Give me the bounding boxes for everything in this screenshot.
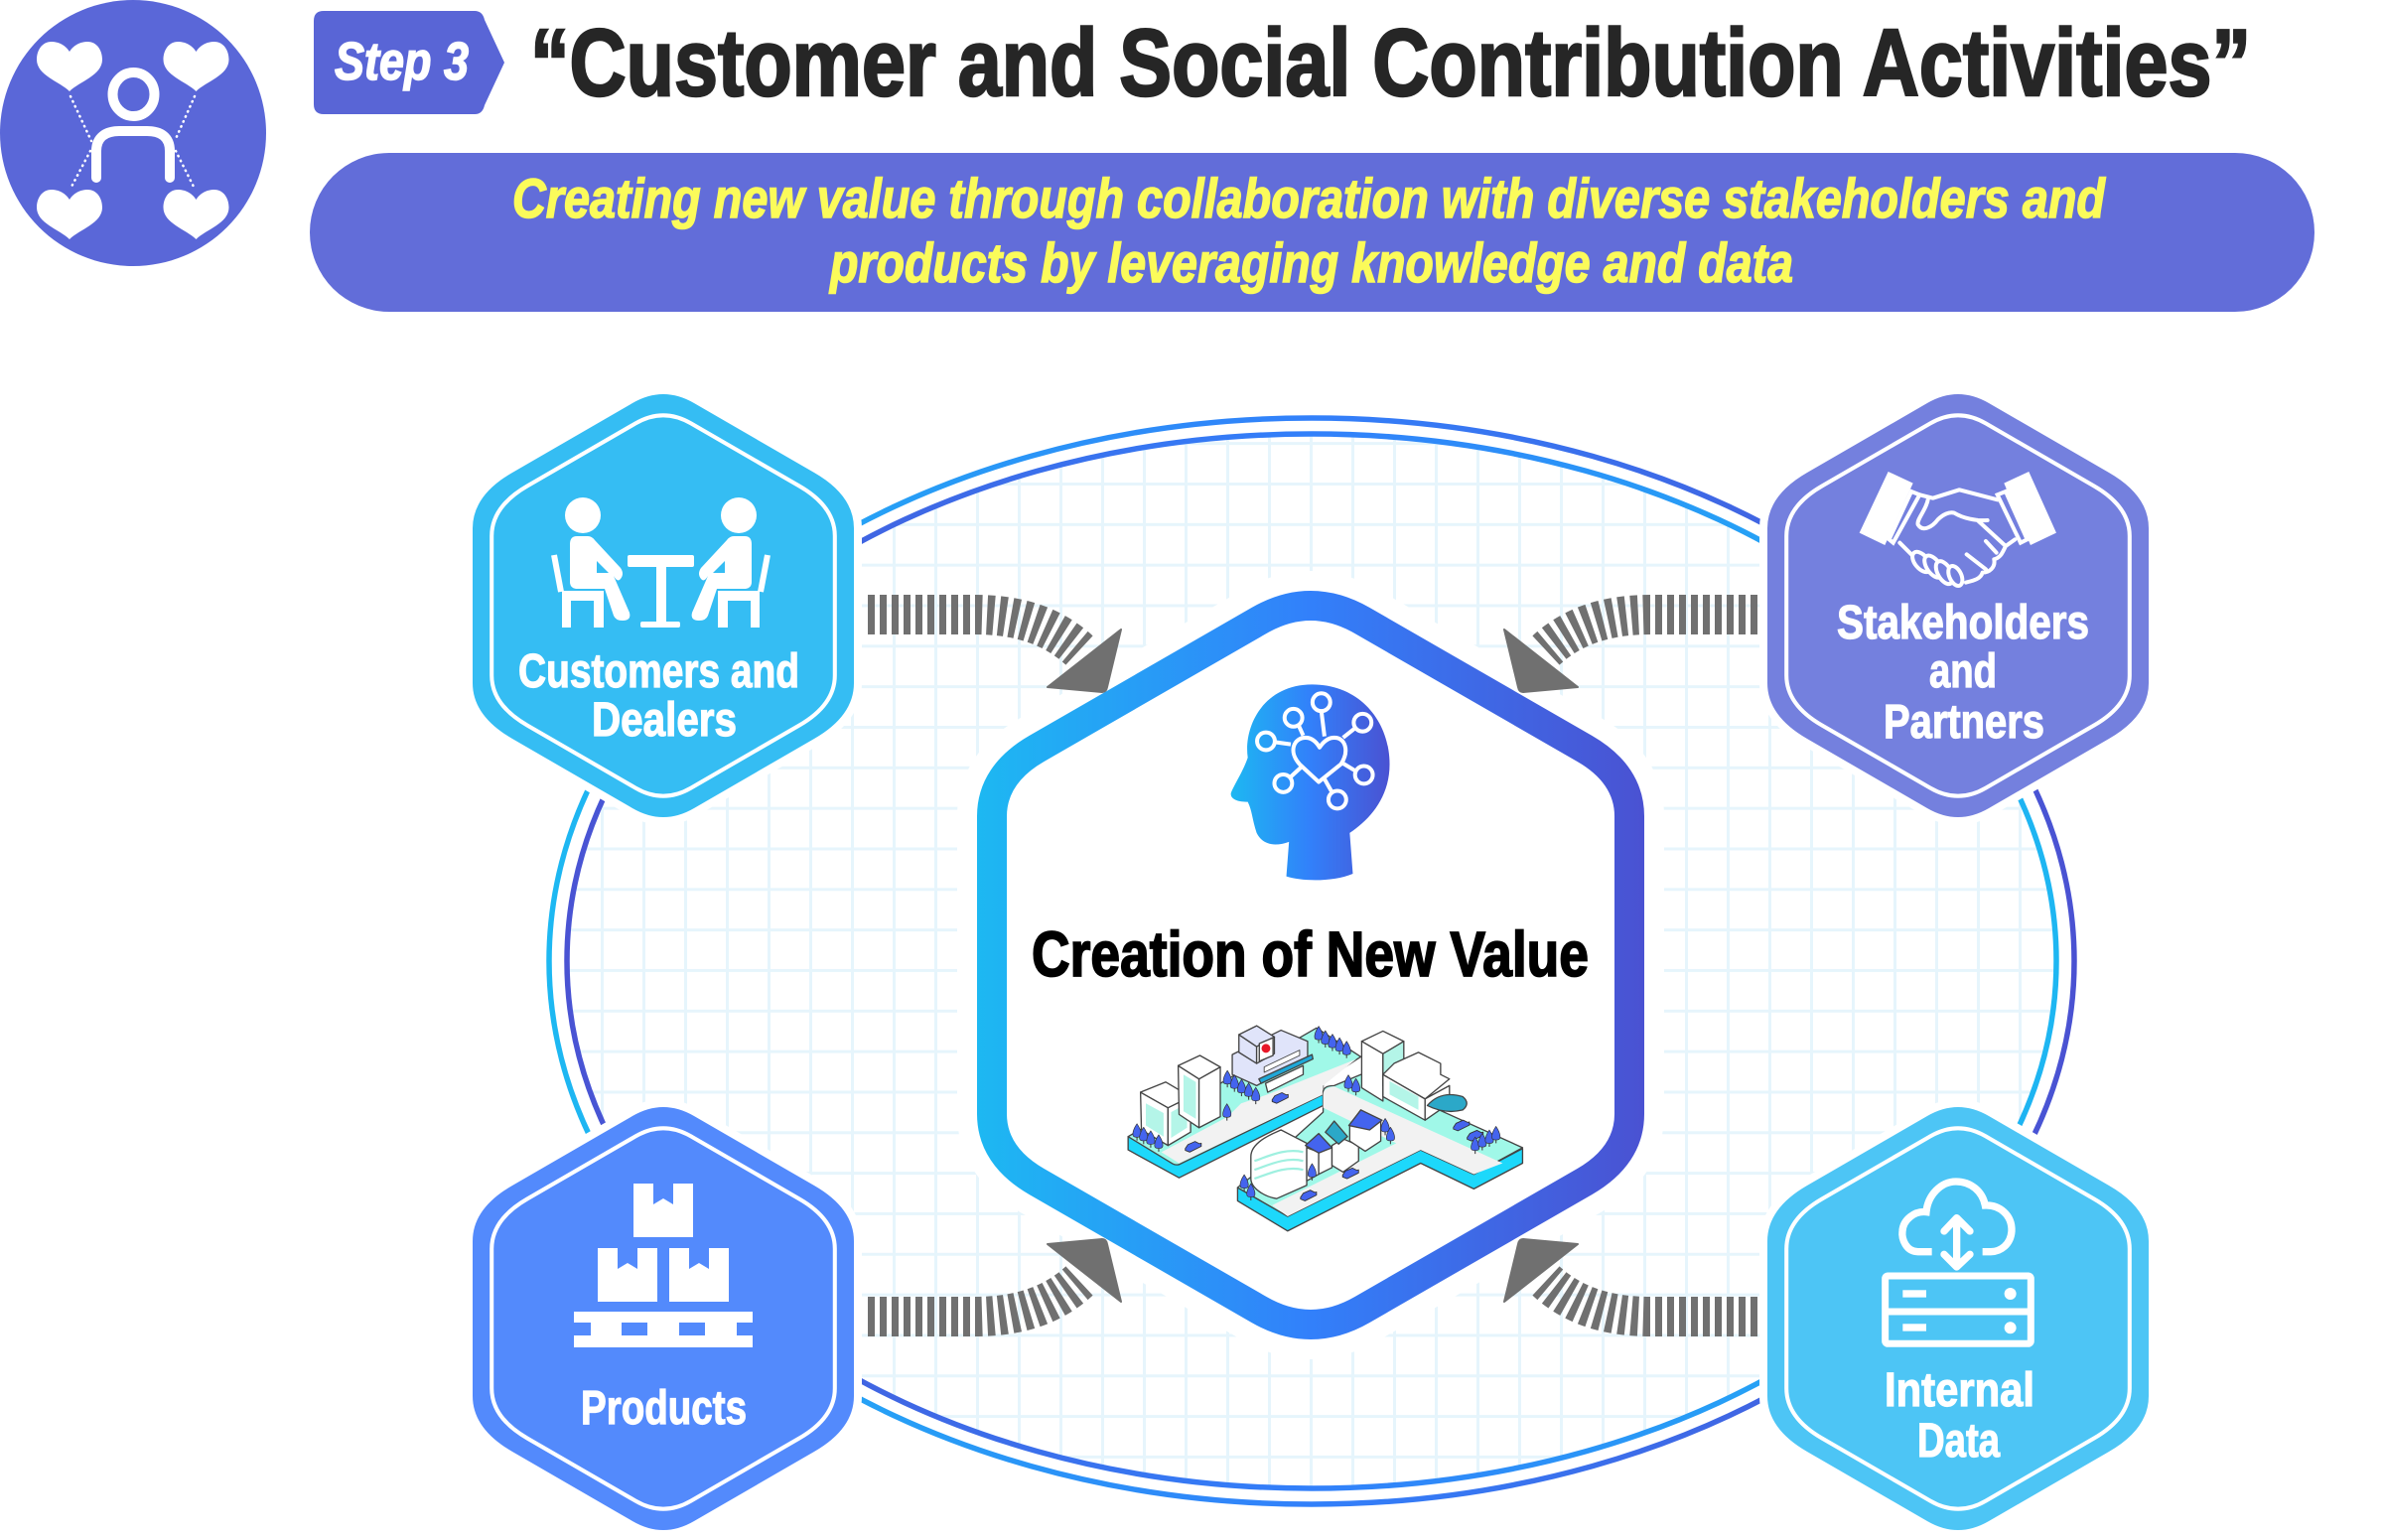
step tag: Step 3 (335, 32, 469, 91)
label: stakeholders and partners (1837, 597, 2089, 749)
buildings (1141, 1092, 1168, 1146)
label: customers and dealers: Customers and (518, 645, 799, 698)
label: stakeholders and partners: Partners (1884, 696, 2044, 749)
label: stakeholders and partners: and (1929, 645, 1997, 698)
icon: handshake (1860, 472, 2056, 588)
panel: internal data (1767, 1107, 2149, 1530)
label: internal data: Internal (1885, 1364, 2034, 1417)
trees (1133, 1027, 1500, 1200)
label: internal data (1885, 1364, 2034, 1468)
step tag (314, 11, 504, 114)
left island (1128, 1092, 1324, 1178)
arrow: internal data to centre (1504, 1239, 1757, 1317)
icon: two people at a table (554, 497, 768, 628)
hexagon halos (473, 394, 2149, 1530)
panel: products (473, 1107, 854, 1530)
heading: creation of new value: Creation of New Value (1032, 918, 1589, 990)
subtitle banner (310, 153, 2314, 312)
icon: person with hearts (0, 0, 266, 266)
icon: boxes on pallet (574, 1184, 753, 1347)
label: customers and dealers (518, 645, 799, 747)
label: internal data: Data (1917, 1415, 2000, 1468)
label: customers and dealers: Dealers (592, 694, 737, 747)
label: products: Products (581, 1382, 747, 1435)
background grid ellipse (556, 427, 2085, 1509)
outer ring (549, 418, 2074, 1504)
illustration: isometric city (1128, 1026, 1522, 1231)
subtitle banner: products by leveraging knowledge and data (828, 231, 1793, 294)
inner ring (567, 434, 2056, 1488)
arrow: stakeholders to centre (1504, 615, 1757, 692)
label: stakeholders and partners: Stakeholders (1837, 597, 2089, 649)
arrow: products to centre (868, 1239, 1121, 1317)
panel: creation of new value (992, 606, 1629, 1325)
vehicles (1186, 1093, 1483, 1200)
subtitle banner: Creating new value through collaboration with diverse stakeholders and (512, 167, 2106, 229)
arrow: customers to centre (868, 615, 1121, 692)
right island (1237, 1149, 1522, 1231)
panel: stakeholders and partners (1767, 394, 2149, 817)
icon: cloud and server (1886, 1182, 2031, 1343)
icon: head with heart network (1231, 684, 1390, 880)
panel: customers and dealers (473, 394, 854, 817)
